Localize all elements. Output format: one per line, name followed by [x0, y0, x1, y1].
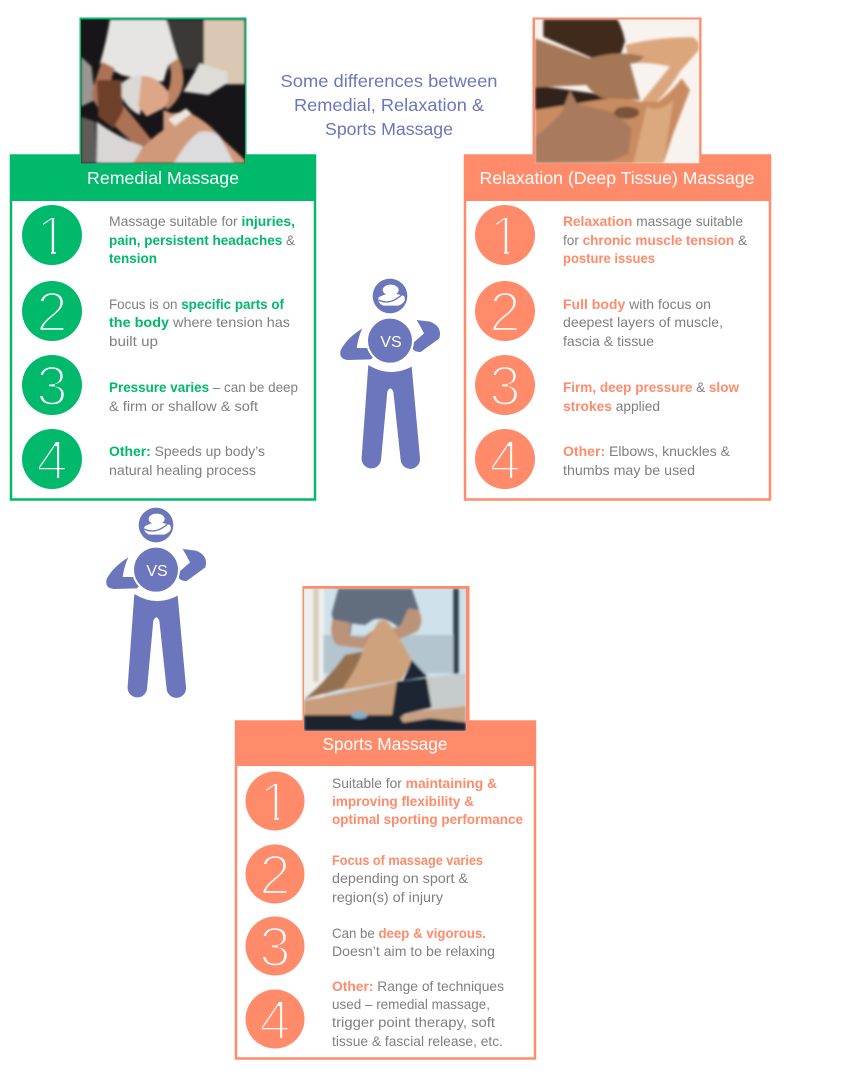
icon: VS figure between remedial and sports	[106, 508, 206, 698]
item 1: Suitable for maintaining &	[332, 776, 497, 791]
item 3: Can be deep & vigorous.	[332, 926, 486, 941]
panel header: Relaxation (Deep Tissue) Massage	[480, 168, 754, 188]
item 4: Other: Range of techniques	[332, 979, 504, 994]
item 2: Focus of massage varies	[332, 853, 483, 868]
panel header	[10, 155, 316, 201]
item 2: Focus is on specific parts of	[109, 297, 284, 312]
item 1	[246, 770, 523, 833]
number badge 3	[22, 354, 82, 417]
item 1: optimal sporting performance	[332, 812, 523, 827]
title: Remedial, Relaxation &	[294, 95, 484, 115]
title: Some differences between	[280, 71, 498, 91]
item 1: posture issues	[563, 251, 655, 266]
number badge 2: 2	[36, 280, 68, 343]
number badge 3: 3	[259, 915, 291, 978]
item 4: thumbs may be used	[563, 463, 695, 478]
item 3: Firm, deep pressure & slow	[563, 380, 739, 395]
panel: remedial massage	[10, 18, 316, 500]
item 1: tension	[109, 251, 157, 266]
number badge 2	[246, 843, 304, 906]
number badge 4	[475, 428, 535, 491]
item 1: Relaxation massage suitable	[563, 214, 743, 229]
icon: VS figure between remedial and relaxation	[340, 279, 440, 469]
item 2: deepest layers of muscle,	[563, 315, 723, 330]
item 4: trigger point therapy, soft	[332, 1015, 495, 1030]
number badge 2: 2	[489, 280, 521, 343]
number badge 1	[475, 204, 535, 267]
item 4: tissue & fascial release, etc.	[332, 1034, 503, 1049]
title: Sports Massage	[325, 119, 453, 139]
number badge 3: 3	[489, 354, 521, 417]
item 2	[22, 280, 290, 349]
item 2: fascia & tissue	[563, 334, 654, 349]
item 1: pain, persistent headaches &	[109, 233, 295, 248]
item 4: Other: Elbows, knuckles &	[563, 444, 730, 459]
item 4: Other: Speeds up body’s	[109, 444, 265, 459]
number badge 4	[22, 428, 82, 491]
panel: relaxation massage	[464, 18, 771, 500]
number badge 3: 3	[36, 354, 68, 417]
panel header	[235, 721, 536, 766]
item 1	[475, 204, 747, 267]
item 2	[246, 843, 483, 906]
panel header: Remedial Massage	[87, 168, 239, 188]
item 4	[246, 979, 504, 1051]
number badge 3	[475, 354, 535, 417]
title	[280, 71, 498, 139]
item 4: used – remedial massage,	[332, 997, 490, 1012]
icon: VS figure between remedial and sports: VS	[146, 563, 168, 580]
item 1: Massage suitable for injuries,	[109, 214, 295, 229]
number badge 1: 1	[489, 204, 521, 267]
panel: sports massage	[235, 586, 536, 1058]
item 1: improving flexibility &	[332, 794, 474, 809]
item 3	[475, 354, 739, 417]
number badge 1: 1	[259, 770, 291, 833]
item 2	[475, 280, 723, 349]
item 3: strokes applied	[563, 399, 660, 414]
number badge 2: 2	[259, 843, 291, 906]
panel header: Sports Massage	[322, 734, 448, 754]
item 4	[22, 428, 265, 491]
number badge 1	[246, 770, 304, 833]
item 2: region(s) of injury	[332, 890, 443, 905]
photo: therapist stretching knee	[302, 586, 470, 732]
item 2: the body where tension has	[109, 315, 290, 330]
number badge 1: 1	[36, 204, 68, 267]
number badge 4: 4	[489, 428, 521, 491]
number badge 4: 4	[259, 988, 291, 1051]
photo: therapist massaging woman's neck	[80, 18, 246, 164]
item 3: Pressure varies – can be deep	[109, 380, 298, 395]
item 2: depending on sport &	[332, 871, 468, 886]
number badge 2	[475, 280, 535, 343]
number badge 4: 4	[36, 428, 68, 491]
number badge 3	[246, 915, 304, 978]
item 2: built up	[109, 334, 158, 349]
panel header	[464, 155, 771, 201]
number badge 2	[22, 280, 82, 343]
item 1	[22, 204, 295, 267]
number badge 1	[22, 204, 82, 267]
panel frame	[465, 156, 770, 500]
item 3: & firm or shallow & soft	[109, 399, 258, 414]
photo: hands massaging shoulder	[532, 18, 702, 164]
icon: VS figure between remedial and relaxation: VS	[380, 334, 402, 351]
item 3	[246, 915, 495, 978]
item 2: Full body with focus on	[563, 297, 711, 312]
item 4	[475, 428, 730, 491]
item 4: natural healing process	[109, 463, 256, 478]
item 3	[22, 354, 298, 417]
item 3: Doesn’t aim to be relaxing	[332, 944, 495, 959]
item 1: for chronic muscle tension &	[563, 233, 747, 248]
number badge 4	[246, 988, 304, 1051]
panel frame	[11, 156, 315, 500]
panel frame	[236, 722, 535, 1058]
